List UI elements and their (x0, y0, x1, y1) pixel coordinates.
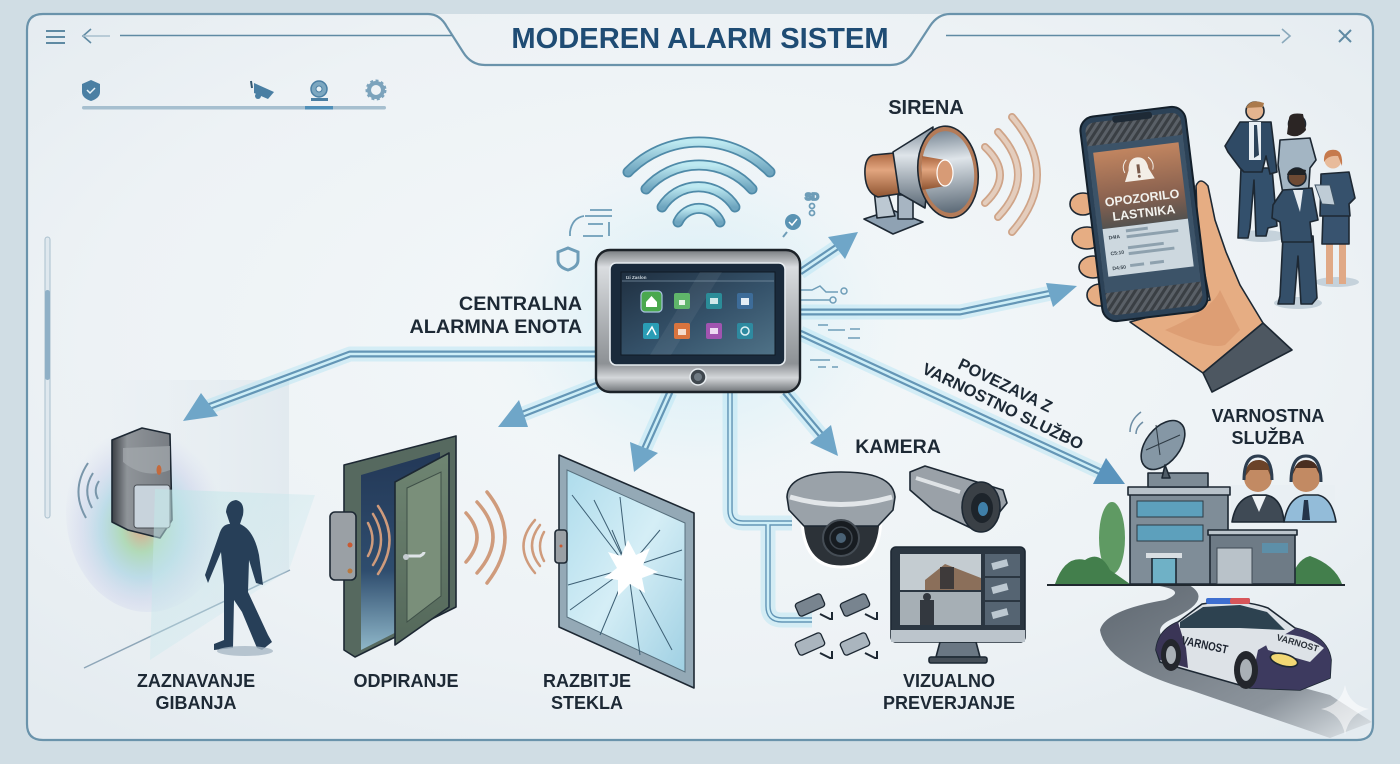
monitor with camera feeds (891, 547, 1025, 663)
tree and bushes (1055, 502, 1342, 584)
title: MODEREN ALARM SISTEM (511, 23, 889, 55)
central alarm unit (596, 250, 800, 392)
controller glow (468, 130, 928, 510)
label: visual verification (883, 671, 1015, 713)
hood text: VARNOST (1275, 632, 1320, 654)
camera button (690, 369, 706, 385)
label: security service (1212, 406, 1324, 448)
sensor beam plane (150, 489, 315, 660)
siren waves (985, 117, 1037, 232)
scroll bar (45, 237, 50, 518)
label: camera: KAMERA (855, 436, 941, 458)
icon: close (1339, 30, 1351, 42)
person shadow (217, 646, 273, 656)
stand (864, 177, 923, 234)
wifi icon (628, 142, 770, 222)
icon: gear (366, 80, 386, 100)
cracks (568, 495, 682, 655)
arrow: top left nav (83, 29, 452, 43)
alert text: OPOZORILO (1104, 187, 1180, 210)
security car (1156, 598, 1331, 690)
details panel: D4:50 (1112, 265, 1127, 272)
alert text (1104, 187, 1182, 225)
label: glass break: RAZBITJE (543, 671, 631, 691)
phone (1079, 105, 1209, 323)
icon: sensor waves (78, 463, 99, 518)
motion scene wall (60, 380, 289, 680)
arrow: to door (498, 382, 605, 427)
icon: shield (82, 80, 100, 101)
waves at glass sensor (524, 520, 544, 573)
person silhouette (205, 500, 272, 650)
satellite dish (1130, 412, 1194, 478)
security staff group (1225, 101, 1359, 309)
door (330, 436, 456, 657)
icon: check pin (783, 214, 801, 237)
label: visual verification: PREVERJANJE (883, 693, 1015, 713)
details panel (1103, 219, 1194, 277)
arrow: to camera (785, 392, 838, 456)
copper tube (865, 152, 905, 197)
arrow: to phone (800, 283, 1077, 312)
label: security service: SLUŽBA (1232, 427, 1304, 448)
details panel: C5:10 (1110, 250, 1125, 257)
label: motion detection (137, 671, 255, 713)
dome camera (787, 472, 895, 567)
icon: camera (251, 81, 274, 99)
arrow: top right nav (946, 29, 1290, 43)
annex garage (1208, 530, 1297, 584)
label: connection to security: POVEZAVA Z (955, 355, 1055, 416)
label: motion detection: GIBANJA (155, 693, 237, 713)
icon: alarm bell (1122, 156, 1155, 182)
heat glow (66, 412, 230, 612)
label: glass break: STEKLA (551, 693, 623, 713)
label: security service: VARNOSTNA (1212, 406, 1324, 426)
person: woman behind (1278, 114, 1316, 200)
label: connection to security: VARNOSTNO SLUŽBO (919, 359, 1086, 454)
label: central unit: CENTRALNA (459, 293, 582, 315)
small cameras (794, 593, 877, 658)
waves between door and glass (466, 492, 505, 583)
person: man front (1272, 168, 1322, 309)
arrow: to siren (800, 232, 858, 272)
broken glass (555, 455, 694, 688)
siren (864, 123, 983, 234)
watermark star (1321, 685, 1369, 735)
horn body (893, 127, 933, 208)
car text: VARNOST (1180, 633, 1230, 657)
small data icons (558, 192, 860, 367)
icon: webcam (311, 81, 328, 101)
motion sensor scene (66, 412, 315, 668)
line: to visual verification (730, 392, 812, 620)
main building (1128, 473, 1230, 584)
operators (1231, 456, 1336, 523)
wheels (1161, 639, 1258, 689)
bullet camera (910, 466, 1007, 532)
arrow: to glass (630, 392, 670, 472)
sleeve cuff (1203, 323, 1292, 392)
motion sensor (112, 428, 172, 538)
person: woman right (1315, 150, 1359, 287)
door leaf (395, 453, 449, 645)
icon: small code: SD (805, 192, 819, 203)
label: central unit: ALARMNA ENOTA (409, 316, 582, 338)
security building (1047, 412, 1345, 585)
label: opening: ODPIRANJE (353, 671, 459, 691)
floor line (84, 570, 290, 668)
arrow: to security service (800, 333, 1125, 484)
hand (1070, 181, 1292, 392)
central alarm unit: Izi Zaslon (626, 275, 647, 280)
icon: small shield (558, 248, 578, 270)
ground line (1047, 584, 1345, 586)
app icons (641, 291, 753, 339)
alert text: LASTNIKA (1112, 202, 1176, 224)
label: central unit (409, 293, 582, 338)
label: visual verification: VIZUALNO (903, 671, 995, 691)
label: glass break (543, 671, 631, 713)
siren label: SIRENA (888, 97, 964, 119)
door sensor (330, 512, 356, 580)
arrow: to motion sensor (183, 354, 600, 421)
details panel: D4łA (1108, 234, 1121, 241)
toolbar track (82, 106, 386, 110)
toolbar: top icons (82, 80, 386, 110)
icon: small code (805, 192, 819, 216)
label: motion detection: ZAZNAVANJE (137, 671, 255, 691)
person: man left (1225, 101, 1286, 242)
glass sensor (555, 530, 567, 563)
door sensor waves (368, 506, 390, 574)
icon: hamburger menu (46, 30, 65, 44)
alert card (1093, 142, 1188, 229)
road (1100, 585, 1372, 738)
